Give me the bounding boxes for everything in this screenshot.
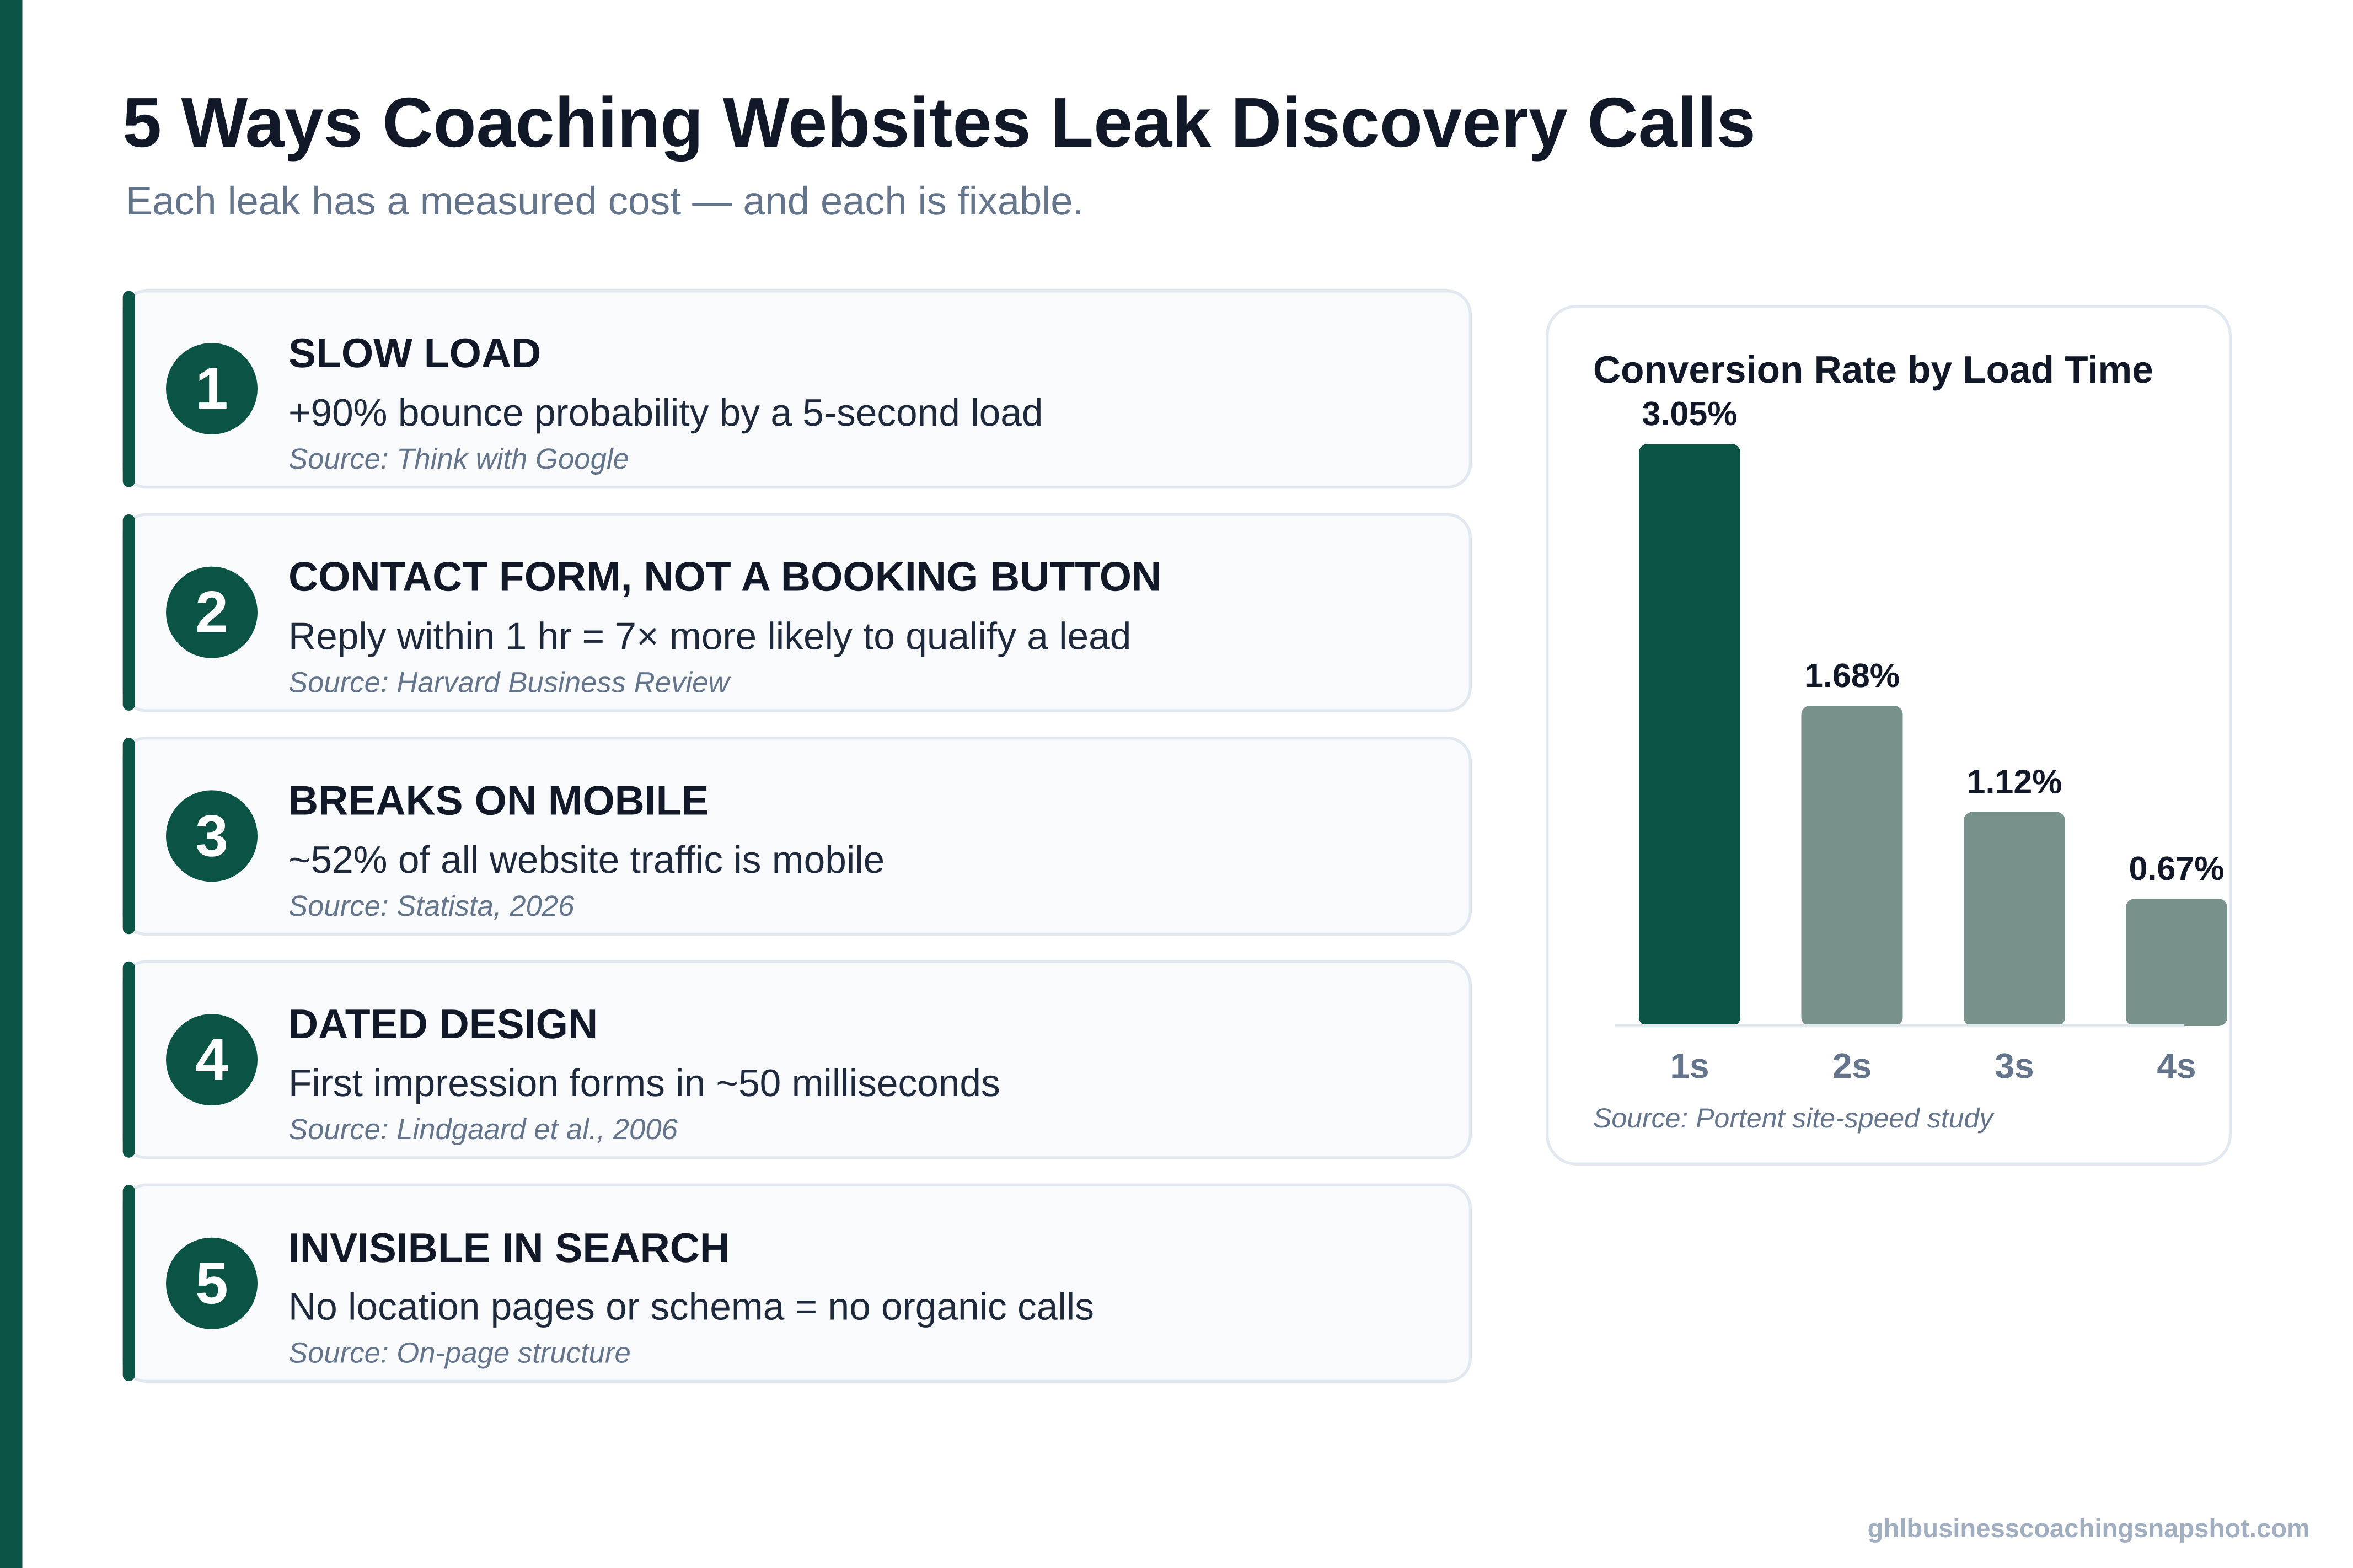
number badge 4: 4 <box>195 1026 228 1092</box>
leak 5 stat: No location pages or schema = no organic calls <box>288 1285 1094 1328</box>
axis labels <box>1670 1046 2196 1086</box>
chart source: Source: Portent site-speed study <box>1593 1103 1995 1134</box>
number badge 5: 5 <box>195 1250 228 1316</box>
axis labels: 3s <box>1995 1046 2034 1086</box>
number badge 3: 3 <box>195 802 228 868</box>
panel: leak 5 search <box>123 1185 1470 1381</box>
leak 1 heading: SLOW LOAD <box>288 330 541 376</box>
bar 2s 1.68%: 1.68% <box>1804 657 1900 694</box>
subtitle: Each leak has a measured cost — and each is fixable. <box>126 179 1084 223</box>
axis labels: 2s <box>1832 1046 1872 1086</box>
accent bar 4 <box>123 962 135 1158</box>
number badge 4 <box>166 1014 258 1105</box>
panel: conversion chart <box>1547 307 2230 1164</box>
leak 4 heading: DATED DESIGN <box>288 1001 598 1047</box>
number badge 2: 2 <box>195 579 228 645</box>
leak 4 stat: First impression forms in ~50 milliseconds <box>288 1061 1000 1104</box>
left accent band <box>0 0 22 1568</box>
bar 1s 3.05%: 3.05% <box>1642 395 1737 432</box>
bar 3s 1.12% <box>1964 763 2065 1026</box>
bar 1s 3.05% <box>1639 395 1740 1026</box>
number badge 3 <box>166 790 258 882</box>
chart title: Conversion Rate by Load Time <box>1593 348 2153 391</box>
panel: leak 1 slow load <box>123 291 1470 487</box>
leak 3 stat: ~52% of all website traffic is mobile <box>288 838 885 881</box>
leak 3 source: Source: Statista, 2026 <box>288 890 575 922</box>
accent bar 2 <box>123 514 135 711</box>
leak 1 stat: +90% bounce probability by a 5-second load <box>288 391 1043 434</box>
number badge 2 <box>166 567 258 658</box>
panel: leak 2 contact form <box>123 514 1470 711</box>
leak 2 heading: CONTACT FORM, NOT A BOOKING BUTTON <box>288 554 1161 600</box>
leak 2 source: Source: Harvard Business Review <box>288 666 731 699</box>
number badge 1 <box>166 343 258 434</box>
bar chart <box>1615 395 2227 1086</box>
leak 2 stat: Reply within 1 hr = 7× more likely to qualify a lead <box>288 614 1131 657</box>
footer website credit: ghlbusinesscoachingsnapshot.com <box>1868 1514 2310 1543</box>
axis labels: 1s <box>1670 1046 1709 1086</box>
number badge 1: 1 <box>195 355 228 421</box>
accent bar 1 <box>123 291 135 487</box>
axis labels: 4s <box>2157 1046 2196 1086</box>
leak 1 source: Source: Think with Google <box>288 443 629 475</box>
bar 3s 1.12%: 1.12% <box>1967 763 2062 801</box>
leak 5 heading: INVISIBLE IN SEARCH <box>288 1225 730 1271</box>
bar 2s 1.68% <box>1801 657 1902 1026</box>
title: 5 Ways Coaching Websites Leak Discovery Calls <box>122 83 1756 162</box>
bar 4s 0.67%: 0.67% <box>2129 850 2224 887</box>
leak 3 heading: BREAKS ON MOBILE <box>288 777 709 823</box>
leak 4 source: Source: Lindgaard et al., 2006 <box>288 1113 678 1146</box>
accent bar 3 <box>123 738 135 934</box>
accent bar 5 <box>123 1185 135 1381</box>
panel: leak 4 dated design <box>123 962 1470 1158</box>
number badge 5 <box>166 1238 258 1329</box>
panel: leak 3 mobile <box>123 738 1470 934</box>
bar 4s 0.67% <box>2126 850 2227 1026</box>
leak 5 source: Source: On-page structure <box>288 1337 631 1370</box>
